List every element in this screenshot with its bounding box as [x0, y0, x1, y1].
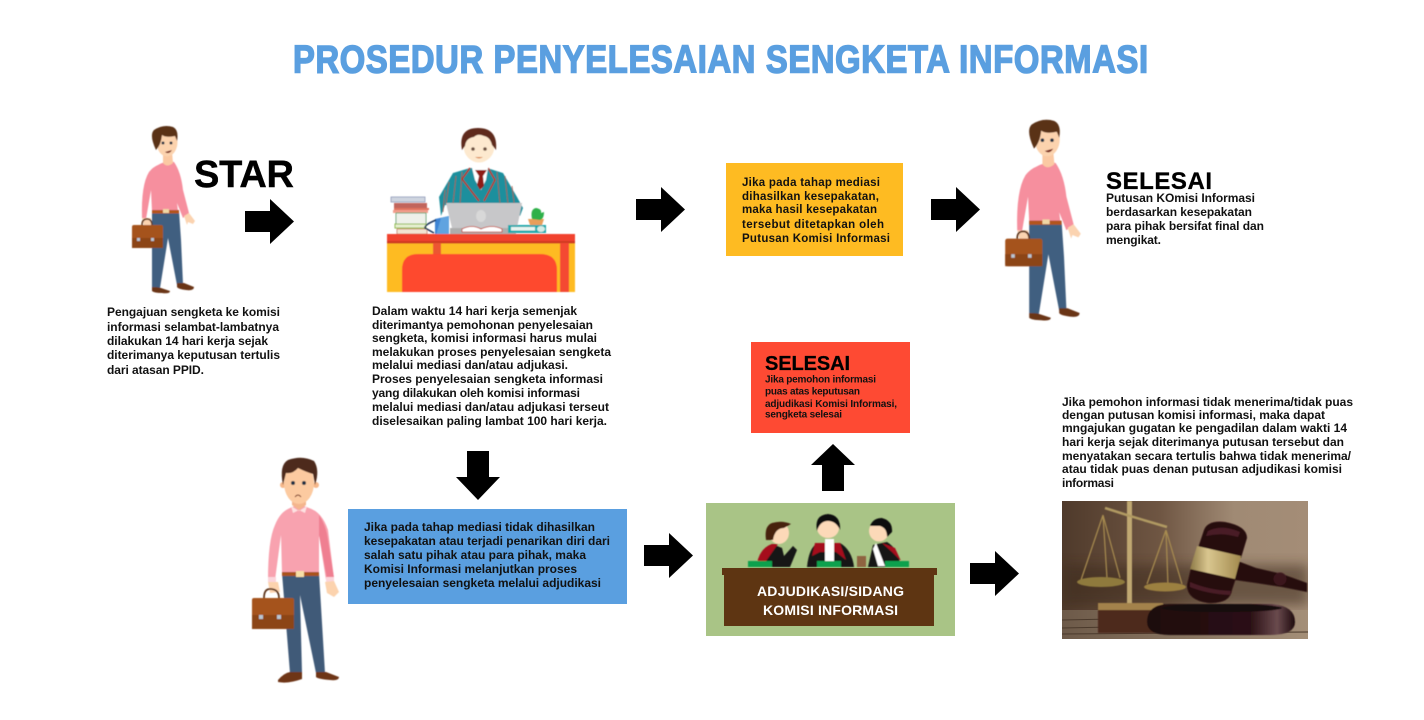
gavel top head	[1198, 522, 1247, 558]
mug	[435, 216, 449, 235]
panel: selesai (red): adjudikasi Komisi Informasi,	[765, 399, 897, 410]
text block: waktu 14 hari: melakukan proses penyelesaian sengketa	[372, 345, 611, 359]
gavel lower head	[1187, 568, 1236, 603]
text block: selesai final	[1106, 168, 1264, 247]
bench	[722, 568, 937, 575]
panel: agreement (yellow): maka hasil kesepakatan	[742, 204, 877, 216]
icon: official at desk	[387, 128, 575, 292]
label: STAR: STAR	[194, 154, 294, 196]
panel: mediation failure (blue): salah satu pihak atau para pihak, maka	[364, 548, 586, 562]
text block: waktu 14 hari: sengketa, komisi informasi harus mulai	[372, 331, 597, 345]
text block: pengajuan sengketa: dilakukan 14 hari kerja sejak	[107, 334, 268, 348]
text block: pemohon tidak puas: hari kerja sejak diterimanya putusan tersebut dan	[1062, 435, 1344, 449]
text block: waktu 14 hari: diterimantya pemohonan penyelesaian	[372, 318, 593, 332]
text block: selesai final: Putusan KOmisi Informasi	[1106, 191, 1255, 205]
jacket	[439, 168, 523, 216]
text block: pemohon tidak puas: Jika pemohon informasi tidak menerima/tidak puas	[1062, 395, 1353, 409]
panel: selesai (red): Jika pemohon informasi	[765, 374, 876, 386]
arrow: agreement to finish	[931, 187, 980, 232]
image: gavel and scales	[1062, 501, 1308, 639]
text block: selesai final: berdasarkan kesepakatan	[1106, 205, 1252, 219]
icon: happy person, finish	[1005, 120, 1081, 320]
text block: pengajuan sengketa: Pengajuan sengketa ke komisi	[107, 305, 280, 319]
plant and folder	[508, 225, 546, 233]
text block: waktu 14 hari: yang dilakukan oleh komisi informasi	[372, 386, 580, 400]
arrow: adjudication to court	[970, 551, 1019, 596]
text block: waktu 14 hari	[372, 304, 611, 428]
text block: waktu 14 hari: melalui mediasi dan/atau adjukasi terseut	[372, 400, 609, 414]
laptop	[446, 203, 522, 228]
panel: mediation failure (blue): Komisi Informasi melanjutkan proses	[364, 562, 577, 576]
gavel handle	[1235, 560, 1307, 592]
text block: pengajuan sengketa: informasi selambat-lambatnya	[107, 320, 279, 334]
text block: pemohon tidak puas: menyatakan secara tertulis bahwa tidak menerima/	[1062, 449, 1352, 463]
bench label: ADJUDIKASI/SIDANG	[757, 583, 904, 599]
panel: mediation failure (blue): kesepakatan atau terjadi penarikan diri dari	[364, 534, 610, 548]
title: PROSEDUR PENYELESAIAN SENGKETA INFORMASI	[293, 38, 1148, 81]
panel: selesai (red): sengketa selesai	[765, 410, 842, 420]
text block: selesai final: mengikat.	[1106, 233, 1161, 247]
sounding block	[1147, 604, 1295, 635]
text block: pengajuan sengketa: diterimanya keputusan tertulis	[107, 348, 280, 362]
panel: agreement (yellow): Jika pada tahap mediasi	[742, 177, 880, 189]
head	[464, 130, 494, 162]
panel: agreement (yellow)	[726, 163, 903, 256]
desk	[387, 234, 575, 292]
text block: waktu 14 hari: Proses penyelesaian sengketa informasi	[372, 372, 603, 386]
bench label	[757, 583, 904, 618]
arrow: up to selesai	[811, 444, 855, 491]
text block: pengajuan sengketa: dari atasan PPID.	[107, 363, 204, 377]
text block: pemohon tidak puas: informasi	[1062, 476, 1114, 490]
gavel brass band	[1190, 546, 1241, 579]
panel: selesai (red): SELESAI	[765, 353, 850, 375]
panel: mediation failure (blue)	[348, 509, 627, 604]
panel: mediation failure (blue): Jika pada tahap mediasi tidak dihasilkan	[364, 520, 595, 534]
icon: happy person, start	[132, 126, 195, 293]
panel: selesai (red)	[751, 342, 910, 433]
text block: waktu 14 hari: diselesaikan paling lambat 100 hari kerja.	[372, 414, 607, 428]
text block: pengajuan sengketa	[107, 305, 280, 377]
books	[391, 197, 425, 202]
icon: sad person	[252, 458, 339, 683]
text block: pemohon tidak puas: atau tidak puas denan putusan adjudikasi komisi	[1062, 462, 1342, 476]
scales	[1127, 501, 1132, 603]
text block: pemohon tidak puas	[1062, 395, 1353, 490]
panel: mediation failure (blue): penyelesaian sengketa melalui adjudikasi	[364, 576, 601, 590]
text block: pemohon tidak puas: dengan putusan komisi informasi, maka dapat	[1062, 408, 1325, 422]
panel: agreement (yellow): Putusan Komisi Informasi	[742, 233, 890, 245]
panel: agreement (yellow): tersebut ditetapkan oleh	[742, 219, 884, 231]
arrow: start to desk	[245, 199, 294, 244]
arrow: blue to adjudication	[644, 533, 693, 578]
text block: selesai final: SELESAI	[1106, 168, 1212, 195]
text block: selesai final: para pihak bersifat final dan	[1106, 219, 1264, 233]
panel: selesai (red): puas atas keputusan	[765, 386, 860, 398]
bench label: KOMISI INFORMASI	[763, 602, 898, 618]
icon: three judges	[748, 514, 909, 567]
panel: agreement (yellow): dihasilkan kesepakatan,	[742, 191, 879, 203]
arrow: down to mediation failure	[456, 451, 500, 500]
panel: adjudication hearing (green)	[706, 503, 955, 636]
text block: waktu 14 hari: melalui mediasi dan/atau adjukasi.	[372, 358, 568, 372]
text block: waktu 14 hari: Dalam waktu 14 hari kerja semenjak	[372, 304, 577, 318]
arrow: desk to agreement	[636, 187, 685, 232]
text block: pemohon tidak puas: mngajukan gugatan ke pengadilan dalam wakti 14	[1062, 421, 1347, 435]
